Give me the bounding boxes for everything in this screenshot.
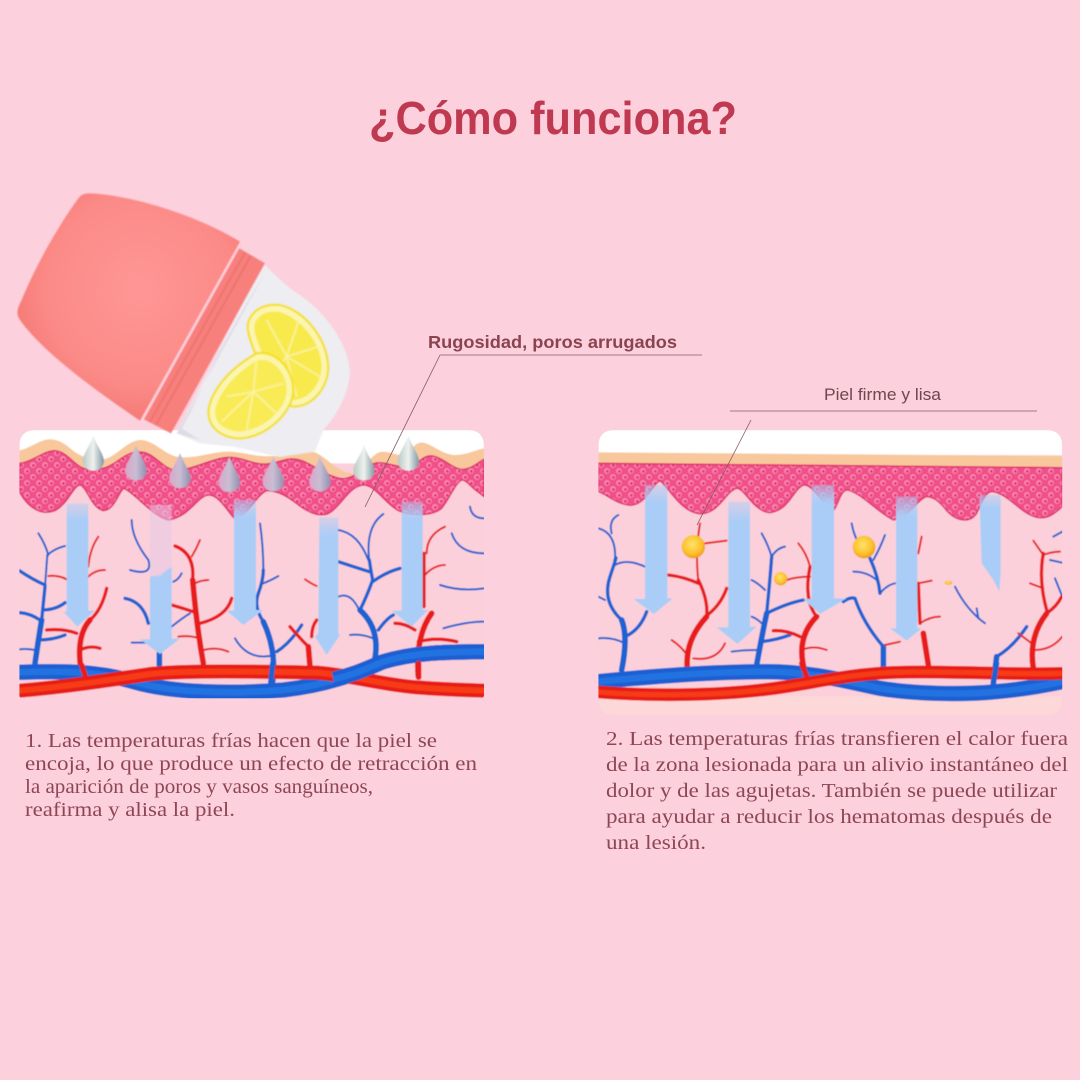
- main vein: [19, 652, 484, 692]
- main artery: [598, 672, 1062, 695]
- collar rings: [144, 248, 265, 433]
- callout: firm skin: [697, 386, 1037, 525]
- panel: skin diagram 2, firm skin: [598, 430, 1062, 715]
- lemon slice upper: [248, 305, 328, 407]
- text block 2: una lesión.: [606, 832, 706, 854]
- text block 2: 2. Las temperaturas frías transfieren el calor fuera: [606, 728, 1068, 750]
- text block 1: reafirma y alisa la piel.: [25, 799, 235, 821]
- title: ¿Cómo funciona?: [369, 92, 737, 144]
- callout: rough skin: [365, 332, 702, 507]
- heat spots: [682, 535, 952, 585]
- text block 1: [25, 730, 477, 821]
- lemon slice lower: [208, 353, 293, 438]
- panel: skin diagram 1, wrinkled skin: [19, 430, 484, 698]
- main artery: [19, 671, 484, 691]
- text block 1: encoja, lo que produce un efecto de retracción en: [25, 753, 477, 775]
- callout: firm skin: Piel firme y lisa: [824, 386, 942, 404]
- ice roller product: [17, 193, 350, 457]
- cold arrows panel 2: [633, 485, 1001, 644]
- text block 2: dolor y de las agujetas. También se puede utilizar: [606, 780, 1057, 802]
- silicone cap: [17, 193, 240, 421]
- ice block: [177, 263, 350, 457]
- text block 2: [606, 728, 1069, 854]
- text block 1: la aparición de poros y vasos sanguíneos,: [25, 776, 373, 798]
- cold arrows panel 1: [63, 500, 428, 655]
- text block 1: 1. Las temperaturas frías hacen que la piel se: [25, 730, 437, 752]
- vessels panel 2: [598, 515, 1062, 695]
- text block 2: para ayudar a reducir los hematomas después de: [606, 806, 1052, 828]
- vessels panel 1: [19, 507, 484, 692]
- text block 2: de la zona lesionada para un alivio instantáneo del: [606, 754, 1069, 776]
- main vein: [598, 672, 1062, 694]
- callout: rough skin: Rugosidad, poros arrugados: [428, 332, 677, 352]
- droplets: [83, 435, 419, 492]
- dermis layer with cells: [598, 463, 1062, 520]
- epidermis layer with cells: [19, 451, 484, 520]
